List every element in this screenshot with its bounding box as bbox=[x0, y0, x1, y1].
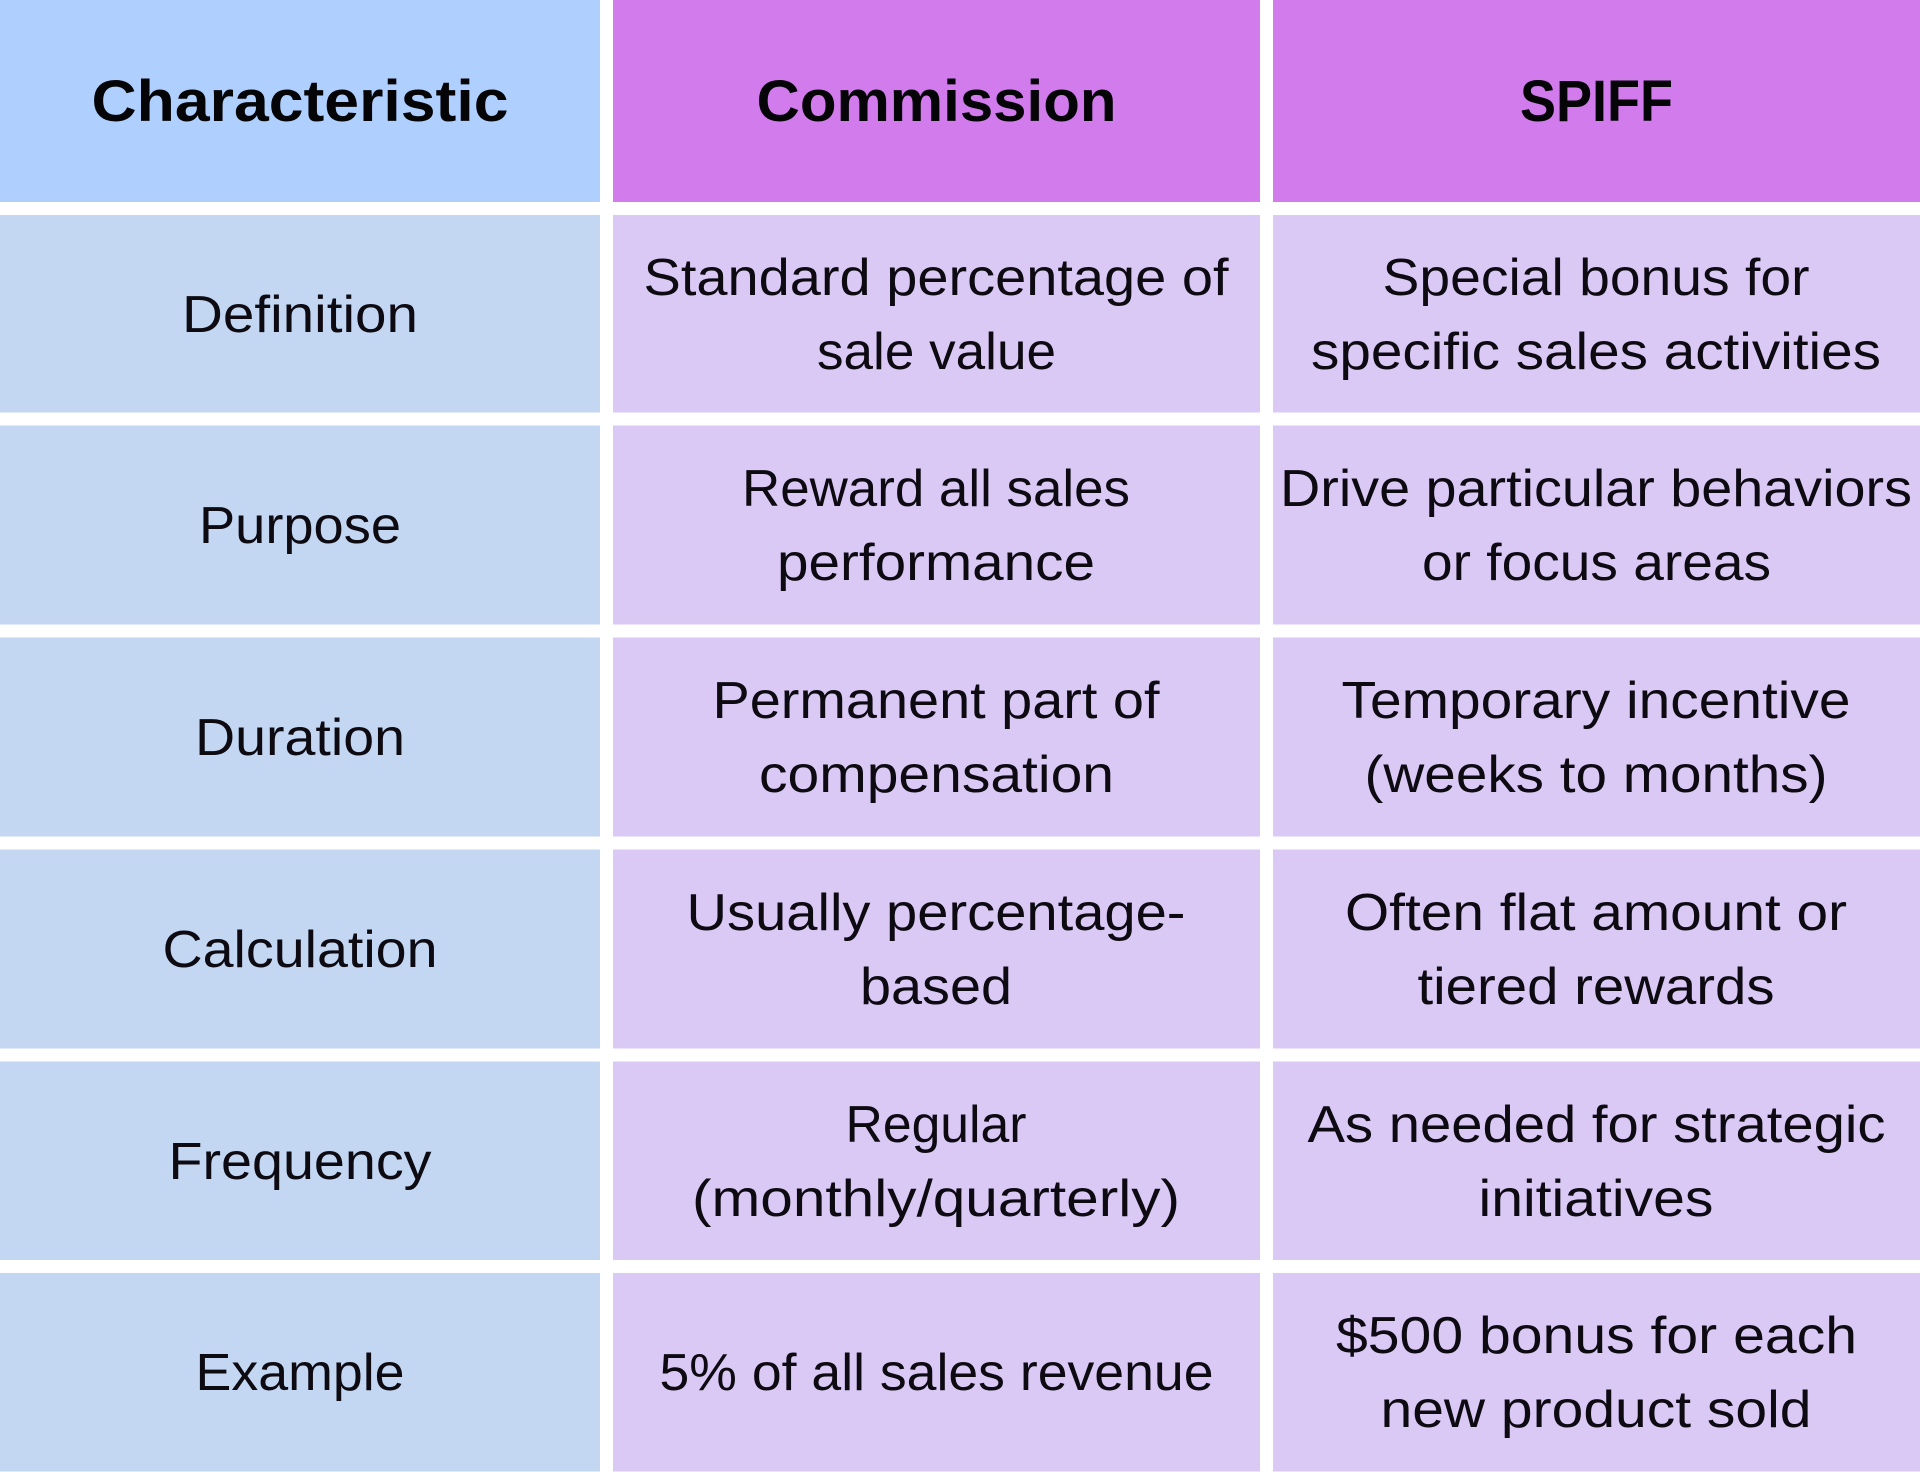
commission: definition: Standard percentage of bbox=[644, 249, 1229, 307]
commission: frequency bbox=[613, 1062, 1260, 1260]
SPIFF: example: $500 bonus for each bbox=[1336, 1307, 1857, 1365]
SPIFF: duration: (weeks to months) bbox=[1364, 746, 1828, 804]
header: Characteristic bbox=[0, 0, 600, 202]
commission: duration: Permanent part of bbox=[712, 672, 1160, 730]
SPIFF: definition bbox=[1273, 215, 1920, 412]
label: Example: Example bbox=[196, 1344, 404, 1402]
row: Example bbox=[0, 1273, 1920, 1472]
commission: definition: sale value bbox=[817, 323, 1056, 381]
commission: calculation: Usually percentage- bbox=[686, 884, 1186, 942]
SPIFF: duration: Temporary incentive bbox=[1342, 672, 1850, 730]
label: Duration bbox=[0, 638, 600, 836]
label: Frequency bbox=[0, 1062, 600, 1260]
header: SPIFF bbox=[1273, 0, 1920, 202]
label: Duration: Duration bbox=[195, 709, 405, 767]
row: Duration bbox=[0, 638, 1920, 836]
SPIFF: calculation bbox=[1273, 850, 1920, 1048]
commission: duration bbox=[613, 638, 1260, 836]
commission: frequency: Regular bbox=[846, 1096, 1026, 1154]
SPIFF: definition: specific sales activities bbox=[1311, 323, 1881, 381]
row: Purpose bbox=[0, 426, 1920, 624]
commission: purpose: Reward all sales bbox=[742, 460, 1130, 518]
label: Calculation: Calculation bbox=[162, 921, 438, 979]
commission: purpose: performance bbox=[777, 534, 1095, 592]
commission: calculation bbox=[613, 850, 1260, 1048]
SPIFF: purpose: or focus areas bbox=[1422, 534, 1771, 592]
label: Calculation bbox=[0, 850, 600, 1048]
commission: definition bbox=[613, 215, 1260, 412]
SPIFF: example bbox=[1273, 1273, 1920, 1472]
commission: duration: compensation bbox=[759, 746, 1114, 804]
row: Definition bbox=[0, 215, 1920, 412]
SPIFF: purpose bbox=[1273, 426, 1920, 624]
SPIFF: frequency: initiatives bbox=[1478, 1170, 1714, 1228]
commission: example bbox=[613, 1273, 1260, 1472]
commission: calculation: based bbox=[860, 958, 1012, 1016]
header: Commission bbox=[613, 0, 1260, 202]
SPIFF: example: new product sold bbox=[1380, 1381, 1812, 1439]
row: Frequency bbox=[0, 1062, 1920, 1260]
commission: purpose bbox=[613, 426, 1260, 624]
SPIFF: frequency bbox=[1273, 1062, 1920, 1260]
label: Purpose: Purpose bbox=[199, 497, 401, 555]
commission: example: 5% of all sales revenue bbox=[660, 1344, 1214, 1402]
label: Frequency: Frequency bbox=[168, 1133, 432, 1191]
commission: frequency: (monthly/quarterly) bbox=[692, 1170, 1180, 1228]
SPIFF: frequency: As needed for strategic bbox=[1308, 1096, 1886, 1154]
header: SPIFF: SPIFF bbox=[1520, 69, 1673, 134]
header: Characteristic: Characteristic bbox=[92, 69, 508, 134]
SPIFF: calculation: Often flat amount or bbox=[1345, 884, 1847, 942]
SPIFF: calculation: tiered rewards bbox=[1418, 958, 1774, 1016]
label: Example bbox=[0, 1273, 600, 1472]
label: Definition: Definition bbox=[182, 286, 418, 344]
header: Commission: Commission bbox=[756, 69, 1116, 134]
SPIFF: definition: Special bonus for bbox=[1382, 249, 1810, 307]
label: Definition bbox=[0, 215, 600, 412]
label: Purpose bbox=[0, 426, 600, 624]
header row bbox=[0, 0, 1920, 202]
SPIFF: duration bbox=[1273, 638, 1920, 836]
SPIFF: purpose: Drive particular behaviors bbox=[1280, 460, 1912, 518]
row: Calculation bbox=[0, 850, 1920, 1048]
